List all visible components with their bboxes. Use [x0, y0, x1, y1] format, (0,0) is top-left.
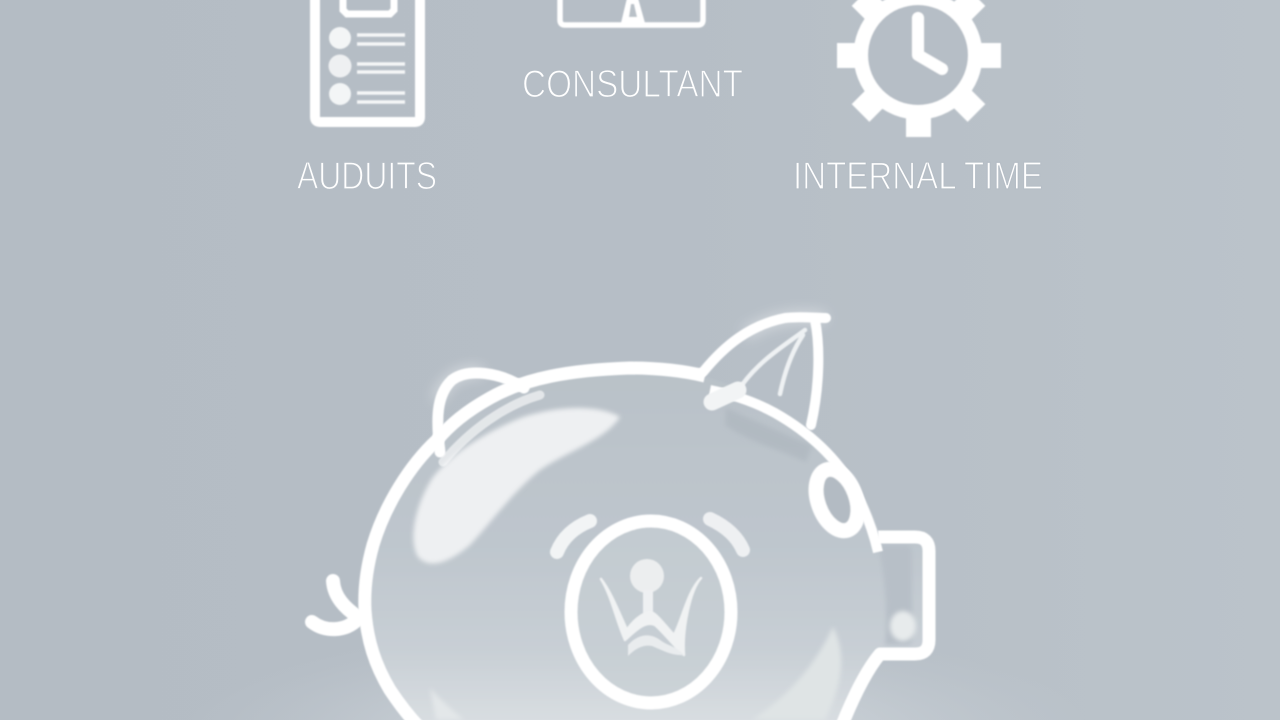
icon: consultant figure — [560, 0, 703, 25]
snout side outline — [840, 537, 929, 720]
icon: gear with clock — [837, 0, 1001, 137]
lower right crescent highlight — [752, 627, 841, 720]
coin person emblem — [601, 559, 701, 656]
label: consultant: CONSULTANT — [522, 63, 743, 106]
tail — [312, 581, 358, 629]
ear hole — [808, 463, 866, 537]
right ear inner lines — [742, 330, 805, 394]
lower left faint highlight — [430, 688, 464, 720]
ear glow — [437, 317, 826, 400]
label: internal time: INTERNAL TIME — [793, 155, 1043, 198]
left ear — [438, 373, 524, 452]
right eye — [710, 519, 743, 550]
label: auduits: AUDUITS — [297, 155, 437, 198]
ear cuff — [712, 390, 738, 402]
pig body fill — [365, 368, 929, 720]
floor glow — [0, 560, 1280, 720]
snout side glow — [890, 611, 916, 641]
left ear base line — [443, 395, 540, 462]
right ear — [703, 317, 826, 425]
illustration: glass piggy bank — [312, 317, 929, 720]
right shoulder outline — [710, 390, 878, 552]
left eye — [557, 521, 590, 552]
snout side shade — [878, 545, 912, 645]
cuff shading band — [725, 408, 812, 462]
pig body outline — [365, 368, 705, 720]
top highlight blob — [413, 408, 620, 563]
icon: clipboard audits — [315, 0, 420, 122]
coin circle — [571, 521, 731, 703]
